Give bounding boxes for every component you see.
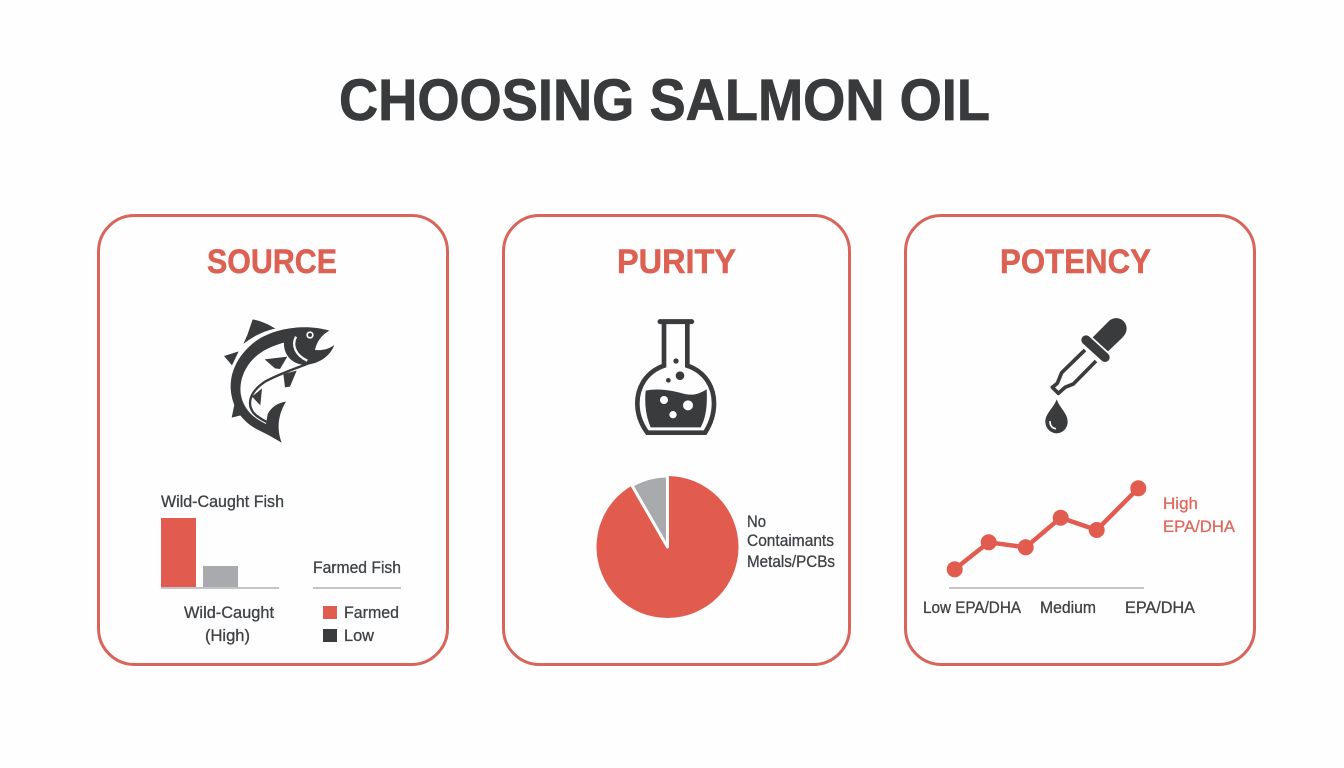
pie label: Contaimants [747,532,834,550]
icon: salmon [224,319,334,443]
icon: flask [637,322,714,433]
pie label: Metals/PCBs [747,553,835,571]
bar chart [161,493,401,645]
bar: wild-caught [161,518,196,587]
callout: high EPA/DHA: EPA/DHA [1163,518,1235,536]
legend: Low [344,627,374,645]
chart label: farmed fish: Farmed Fish [313,559,401,577]
callout: high EPA/DHA: High [1163,495,1198,513]
heading: potency: POTENCY [1000,243,1151,281]
axis labels [923,599,1195,617]
bar chart: (High) [205,627,250,645]
axis labels: EPA/DHA [1125,599,1195,617]
chart label: wild-caught fish: Wild-Caught Fish [161,493,284,511]
heading: purity: PURITY [617,243,736,281]
panel: potency [906,216,1254,664]
line chart [923,480,1235,617]
legend [323,604,399,645]
panel: purity [504,216,850,664]
legend: Farmed [344,604,399,622]
title: CHOOSING SALMON OIL [339,68,990,133]
pie chart [596,476,738,618]
icon: dropper [1045,318,1127,433]
pie label: No [747,513,766,531]
heading: source: SOURCE [207,243,337,281]
bar: farmed [203,566,238,587]
pie label [747,513,835,571]
panel: source [98,216,448,664]
chart label: wild-caught high: Wild-Caught [184,604,274,622]
callout: high EPA/DHA [1163,495,1235,536]
axis labels: Low EPA/DHA [923,599,1021,617]
axis labels: Medium [1040,599,1096,617]
